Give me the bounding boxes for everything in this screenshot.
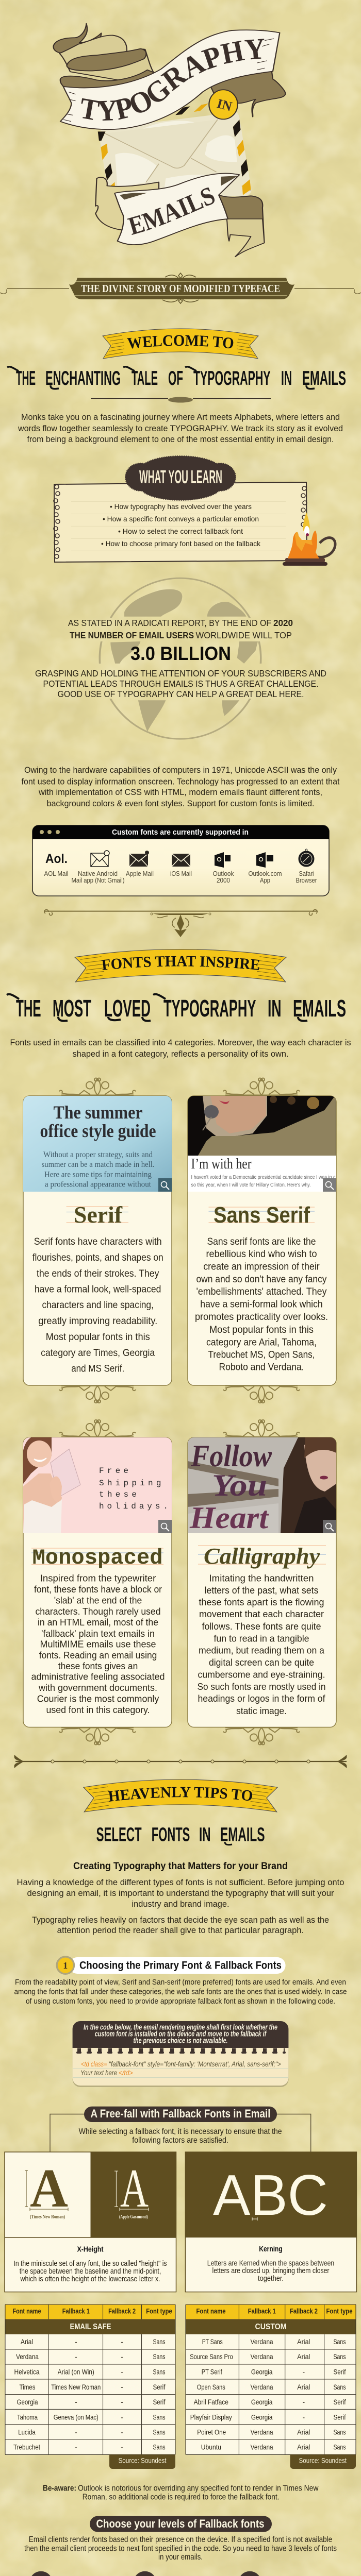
text block: serif description: greatly improving readability. bbox=[38, 1316, 157, 1327]
image: monospaced email sample: Shipping bbox=[99, 1479, 161, 1488]
table: custom fonts: Arial bbox=[297, 2428, 310, 2436]
illustration: apple garamond letter: (Apple Garamond) bbox=[119, 2214, 148, 2219]
image: serif email sample bbox=[23, 1096, 172, 1192]
heading pill: free-fall with fallback fonts: A Free-fall with Fallback Fonts in Email bbox=[91, 2107, 270, 2120]
table: email safe fonts: Geneva (on Mac) bbox=[54, 2413, 99, 2421]
text block: custom fonts history: Owing to the hardware capabilities of computers in 1971, Unicode ASCII was the only bbox=[24, 766, 337, 775]
heading: the enchanting tale of typography in emails: IN bbox=[281, 367, 292, 389]
code: fallback font snippet bbox=[80, 2060, 281, 2077]
image: sans serif email sample: so this year, when I will vote for Hillary Clinton. Here's why. bbox=[191, 1182, 310, 1188]
heading: the most loved typography in emails: THE bbox=[16, 995, 41, 1022]
text block: monospaced description: MultiMIME emails use these bbox=[40, 1639, 156, 1650]
number: 3.0 billion: 3.0 BILLION bbox=[130, 643, 231, 664]
table: custom fonts: CUSTOM bbox=[255, 2323, 287, 2331]
panel: kerning: Letters are Kerned when the spaces between bbox=[207, 2260, 334, 2268]
text block: serif description: Most popular fonts in this bbox=[46, 1332, 150, 1343]
text block: monospaced description: administrative feeling associated bbox=[31, 1672, 165, 1682]
text block: monospaced description: font, these fonts have a block or bbox=[34, 1584, 162, 1595]
level 2 bbox=[134, 2571, 222, 2576]
text block: monospaced description bbox=[31, 1573, 165, 1715]
image: sans serif email sample bbox=[188, 1095, 336, 1192]
icon: android mail bbox=[91, 851, 109, 867]
panel: x-height: X-Height bbox=[77, 2245, 103, 2254]
table: email safe fonts: - bbox=[75, 2443, 77, 2451]
table: email safe fonts: - bbox=[121, 2337, 123, 2346]
divider: beaded line bbox=[14, 1755, 347, 1768]
banner: welcome to: WELCOME TO bbox=[127, 335, 233, 348]
text block: intro: Monks take you on a fascinating journey where Art meets Alphabets, where letters and bbox=[21, 413, 340, 422]
banner: heavenly tips to: HEAVENLY TIPS TO bbox=[108, 1787, 252, 1802]
table: custom fonts bbox=[186, 2304, 356, 2469]
text block: fallback factors: following factors are satisfied. bbox=[132, 2136, 228, 2145]
heading: the most loved typography in emails: LOVED bbox=[104, 995, 151, 1022]
text block: monospaced description: 'slab' at the end of the bbox=[54, 1595, 142, 1605]
table: email safe fonts: - bbox=[75, 2352, 77, 2361]
subheading: creating typography: Creating Typography that Matters for your Brand bbox=[73, 1861, 288, 1872]
panel: x-height: which is often the height of the lowercase letter x. bbox=[20, 2275, 160, 2283]
icon: ios mail bbox=[172, 854, 190, 867]
image: monospaced email sample: holidays. bbox=[99, 1502, 168, 1511]
panel: kerning: letters are closed up, bringing them closer bbox=[212, 2267, 330, 2275]
callout: be-aware: Outlook is notorious for overriding any specified font to render in Times New bbox=[78, 2484, 319, 2493]
callout: be-aware: Roman, so additional code is required to force the fallback font. bbox=[83, 2493, 279, 2501]
panel: kerning: together. bbox=[258, 2275, 284, 2283]
labels: email clients: Outlook bbox=[212, 870, 234, 877]
labels: email clients bbox=[44, 870, 317, 884]
text block: sans serif description: create an impression of their bbox=[203, 1261, 320, 1272]
labels: email clients: AOL Mail bbox=[44, 870, 69, 877]
labels: email clients: Apple Mail bbox=[126, 870, 154, 877]
text block: monospaced description: characters. Though rarely used bbox=[35, 1606, 161, 1617]
panel: kerning bbox=[185, 2152, 356, 2292]
table: email safe fonts: - bbox=[75, 2428, 77, 2436]
code: fallback font snippet: "fallback-font" style="font-family: 'Montserrat', Arial, sans-serif;"> bbox=[109, 2060, 281, 2068]
icon: globe bbox=[100, 578, 261, 739]
illustration: times new roman letter: A bbox=[30, 2158, 68, 2218]
table: email safe fonts: - bbox=[75, 2337, 77, 2346]
text block: serif description bbox=[32, 1236, 163, 1375]
table: custom fonts: Verdana bbox=[251, 2443, 273, 2451]
text block: sans serif description: own and so don't have any fancy bbox=[196, 1274, 327, 1285]
text block: attention challenge: GOOD USE OF TYPOGRAPHY CAN HELP A GREAT DEAL HERE. bbox=[58, 689, 304, 699]
image: serif email sample: a professional appearance without bbox=[45, 1180, 152, 1189]
text block: creating typography: industry and brand image. bbox=[132, 1900, 229, 1909]
icon: safari bbox=[299, 849, 314, 867]
text block: calligraphy description: letters of the past, what sets bbox=[204, 1585, 319, 1596]
code: fallback font snippet: Your text here bbox=[80, 2069, 117, 2077]
table: email safe fonts: - bbox=[75, 2398, 77, 2406]
text block: sans serif description: 'embellishments' attached. They bbox=[196, 1286, 327, 1297]
labels: email clients: Outlook.com bbox=[249, 870, 282, 877]
table: email safe fonts: Times bbox=[20, 2383, 35, 2391]
text block: custom fonts history: background colors & even font styles. Support for custom fonts is limited. bbox=[46, 799, 315, 808]
stat: email users 3.0 billion: WORLDWIDE WILL TOP bbox=[196, 630, 292, 640]
heading: the most loved typography in emails: TYPOGRAPHY bbox=[163, 995, 256, 1022]
text block: creating typography: Having a knowledge of the different types of fonts is not sufficient. Before jumping onto bbox=[17, 1878, 344, 1887]
label: what you learn cloud bbox=[125, 456, 236, 500]
panel: code sample: In the code below, the email rendering engine shall first look whether the bbox=[84, 2024, 277, 2032]
table: email safe fonts: Font name bbox=[12, 2308, 41, 2315]
level 1 bbox=[29, 2571, 112, 2576]
level 3 bbox=[238, 2571, 339, 2576]
text block: serif description: category are Times, Georgia bbox=[41, 1348, 155, 1359]
panel: custom fonts support: Custom fonts are currently supported in bbox=[112, 828, 249, 837]
text block: monospaced description: in an HTML email, most of the bbox=[38, 1617, 158, 1628]
divider: heading ornament bbox=[91, 397, 271, 403]
labels: email clients: App bbox=[260, 876, 270, 884]
table: custom fonts: Sans bbox=[333, 2443, 346, 2451]
labels: email clients: iOS Mail bbox=[170, 870, 192, 877]
text block: tip 1: of using custom fonts, you need to provide appropriate fallback font as shown in the following code. bbox=[26, 1997, 335, 2006]
image: sans serif email sample: I haven't voted for a Democratic presidential candidate since I was in c bbox=[191, 1174, 335, 1180]
panel: custom fonts support bbox=[32, 825, 329, 896]
stat: email users 3.0 billion: THE NUMBER OF EMAIL USERS bbox=[70, 630, 194, 640]
table: email safe fonts: Sans bbox=[153, 2413, 165, 2421]
illustration: kerning letters: ABC bbox=[213, 2163, 328, 2227]
text block: monospaced description: Inspired from the typewriter bbox=[40, 1573, 156, 1584]
panel: code sample bbox=[73, 2021, 289, 2087]
table: custom fonts: Sans bbox=[333, 2337, 346, 2346]
label: what you learn cloud: WHAT YOU LEARN bbox=[139, 466, 222, 487]
list: learning points bbox=[101, 502, 261, 548]
text block: custom fonts history: with implementation of CSS with HTML, modern emails flaunt different fonts, bbox=[38, 788, 322, 797]
source tab: custom table: Source: Soundest bbox=[299, 2456, 347, 2465]
image: monospaced email sample: Free bbox=[99, 1466, 128, 1476]
image: serif email sample: Without a proper strategy, suits and bbox=[43, 1150, 153, 1159]
source tab: email safe table bbox=[109, 2454, 175, 2469]
text block: attention challenge bbox=[35, 668, 326, 699]
image: serif email sample: Here are some tips for maintaining bbox=[44, 1171, 152, 1179]
table: email safe fonts: Font type bbox=[146, 2308, 172, 2315]
callout: be-aware: Be-aware: bbox=[43, 2484, 76, 2493]
text block: calligraphy description: medium, but reading them on a bbox=[199, 1646, 325, 1656]
table: custom fonts: PT Sans bbox=[202, 2337, 223, 2346]
text block: sans serif description bbox=[195, 1236, 328, 1373]
text block: sans serif description: promotes practicality over looks. bbox=[195, 1312, 328, 1323]
text block: font categories intro: shaped in a font category, reflects a personality of its own. bbox=[72, 1049, 289, 1059]
table: custom fonts: Arial bbox=[297, 2443, 310, 2451]
text block: creating typography: attention period the reader shall give to that particular paragraph. bbox=[57, 1926, 304, 1935]
text block: monospaced description: Courier is the most commonly bbox=[37, 1694, 159, 1704]
table: email safe fonts: - bbox=[121, 2413, 123, 2421]
table: custom fonts: Verdana bbox=[251, 2337, 273, 2346]
table: email safe fonts: Arial bbox=[21, 2337, 33, 2346]
banner: tagline: THE DIVINE STORY OF MODIFIED TYPEFACE bbox=[81, 282, 280, 295]
table: custom fonts: Ubuntu bbox=[201, 2443, 221, 2451]
table: email safe fonts: Times New Roman bbox=[51, 2383, 101, 2391]
text block: calligraphy description: fun to read in a tangible bbox=[214, 1633, 309, 1643]
table: email safe fonts: EMAIL SAFE bbox=[70, 2323, 111, 2331]
text block: creating typography: designing an email, it is important to understand the typography that will suit your bbox=[27, 1889, 334, 1898]
panel: sans serif card bbox=[188, 1078, 336, 1403]
heading: the enchanting tale of typography in emails: TALE bbox=[132, 367, 158, 389]
labels: email clients: Browser bbox=[296, 876, 317, 884]
title: IN badge: IN bbox=[215, 96, 234, 114]
table: custom fonts: Georgia bbox=[251, 2413, 273, 2421]
image: calligraphy email sample: Follow bbox=[190, 1439, 272, 1473]
panel: x-height: In the miniscule set of any font, the so called "height" is bbox=[13, 2260, 167, 2268]
text block: font categories intro bbox=[10, 1038, 351, 1059]
text block: intro: from being a background element to one of the most essential entity in email design. bbox=[27, 435, 334, 444]
image: sans serif email sample: I’m with her bbox=[191, 1156, 252, 1172]
table: custom fonts: Verdana bbox=[251, 2383, 273, 2391]
text block: calligraphy description: So such fonts are mostly used in bbox=[197, 1682, 326, 1692]
table: custom fonts: Serif bbox=[333, 2368, 346, 2376]
table: email safe fonts bbox=[5, 2304, 175, 2469]
text block: fallback levels: in your emails. bbox=[158, 2553, 203, 2562]
text block: monospaced description: 'fallback' plain text emails in bbox=[41, 1629, 155, 1639]
table: custom fonts: Font type bbox=[326, 2308, 353, 2315]
callout: be-aware bbox=[43, 2484, 319, 2501]
list: learning points: • How to choose primary font based on the fallback bbox=[101, 539, 261, 548]
text block: serif description: and MS Serif. bbox=[71, 1363, 124, 1375]
table: email safe fonts: - bbox=[121, 2383, 123, 2391]
table: custom fonts: Georgia bbox=[251, 2368, 273, 2376]
icon: outlook 2000 bbox=[215, 852, 231, 868]
table: email safe fonts: Sans bbox=[153, 2337, 165, 2346]
table: email safe fonts: - bbox=[121, 2428, 123, 2436]
illustration: times new roman letter: (Times New Roman) bbox=[30, 2214, 65, 2219]
text block: monospaced description: these fonts gives an bbox=[58, 1661, 138, 1671]
table: custom fonts: Fallback 1 bbox=[248, 2308, 276, 2315]
labels: email clients: Native Android bbox=[78, 870, 118, 877]
table: custom fonts: Font name bbox=[196, 2308, 226, 2315]
icon: apple mail bbox=[129, 851, 149, 867]
heading: the most loved typography in emails: MOST bbox=[53, 995, 91, 1022]
text block: fallback levels bbox=[24, 2535, 337, 2562]
text block: custom fonts history: font used to display information onscreen. Technology has progressed to an extent that bbox=[22, 777, 340, 786]
table: email safe fonts: Sans bbox=[153, 2352, 165, 2361]
image: calligraphy email sample: Heart bbox=[189, 1501, 269, 1535]
text block: calligraphy description: static image. bbox=[236, 1706, 287, 1716]
heading: the enchanting tale of typography in emails: ENCHANTING bbox=[45, 367, 121, 389]
text block: sans serif description: Trebuchet MS, Open Sans, bbox=[208, 1350, 315, 1361]
label: monospaced specimen: Monospaced bbox=[32, 1546, 163, 1570]
image: serif email sample: office style guide bbox=[40, 1121, 156, 1141]
text block: tip 1 bbox=[14, 1978, 347, 2006]
text block: intro bbox=[18, 413, 343, 444]
image: calligraphy email sample: You bbox=[212, 1468, 267, 1502]
list: learning points: • How typography has evolved over the years bbox=[110, 502, 252, 511]
banner: fonts that inspire bbox=[74, 949, 287, 982]
text block: attention challenge: GRASPING AND HOLDING THE ATTENTION OF YOUR SUBSCRIBERS AND bbox=[35, 668, 326, 679]
image: monospaced email sample: these bbox=[99, 1490, 137, 1499]
panel: calligraphy card bbox=[188, 1420, 336, 1744]
label: serif specimen: Serif bbox=[74, 1201, 123, 1228]
text block: serif description: Serif fonts have characters with bbox=[34, 1236, 162, 1247]
heading: select fonts in emails: SELECT bbox=[96, 1824, 142, 1846]
text block: fallback factors bbox=[79, 2127, 282, 2145]
text block: calligraphy description: Imitating the handwritten bbox=[209, 1573, 314, 1584]
table: email safe fonts: Serif bbox=[153, 2398, 166, 2406]
label: sans serif specimen: Sans Serif bbox=[214, 1202, 310, 1228]
heading pill: levels of fallback fonts: Choose your levels of Fallback fonts bbox=[96, 2517, 264, 2530]
heading: the enchanting tale of typography in emails: TYPOGRAPHY bbox=[193, 367, 270, 389]
panel: code sample: the previous choice is not available. bbox=[133, 2037, 228, 2045]
table: custom fonts: Sans bbox=[333, 2352, 346, 2361]
heading: the most loved typography in emails: IN bbox=[268, 995, 282, 1022]
table: email safe fonts: Tahoma bbox=[17, 2413, 38, 2421]
text block: calligraphy description: these fonts apart is the flowing bbox=[199, 1597, 324, 1607]
banner: tagline bbox=[0, 273, 361, 303]
text block: calligraphy description: headings or logos in the form of bbox=[198, 1693, 325, 1704]
table: custom fonts: Open Sans bbox=[197, 2383, 225, 2391]
tip 1: heading pill: Choosing the Primary Font & Fallback Fonts bbox=[79, 1959, 282, 1971]
text block: font categories intro: Fonts used in emails can be classified into 4 categories. Moreover, the way each character is bbox=[10, 1038, 351, 1047]
banner: welcome to bbox=[102, 329, 259, 359]
hero: typography in emails ribbon illustration bbox=[53, 23, 286, 258]
table: custom fonts: Playfair Display bbox=[190, 2413, 232, 2421]
table: custom fonts: Poiret One bbox=[197, 2428, 226, 2436]
text block: calligraphy description bbox=[197, 1573, 326, 1716]
table: custom fonts: Source Sans Pro bbox=[190, 2352, 233, 2361]
table: email safe fonts: - bbox=[121, 2398, 123, 2406]
text block: calligraphy description: cumbersome and eye-straining. bbox=[198, 1669, 325, 1680]
table: custom fonts: Georgia bbox=[251, 2398, 273, 2406]
text block: calligraphy description: movement that each character bbox=[199, 1609, 324, 1619]
table: custom fonts: Sans bbox=[333, 2383, 346, 2391]
heading: the enchanting tale of typography in emails: THE bbox=[16, 367, 36, 389]
banner: heavenly tips to bbox=[83, 1780, 278, 1812]
title: TYPOGRAPHY: TYPOGRAPHY bbox=[81, 39, 264, 121]
table: email safe fonts: Lucida bbox=[18, 2428, 36, 2436]
table: custom fonts: Verdana bbox=[251, 2352, 273, 2361]
text block: sans serif description: rebellious kind who wish to bbox=[206, 1249, 317, 1260]
table: email safe fonts: Georgia bbox=[17, 2398, 38, 2406]
text block: creating typography bbox=[17, 1878, 344, 1935]
tip 1: heading pill: 1 bbox=[63, 1960, 68, 1971]
table: custom fonts: Verdana bbox=[251, 2428, 273, 2436]
text block: sans serif description: Sans serif fonts are like the bbox=[207, 1236, 316, 1247]
table: custom fonts: Serif bbox=[333, 2413, 346, 2421]
text block: sans serif description: category are Arial, Tahoma, bbox=[206, 1337, 317, 1348]
table: email safe fonts: Sans bbox=[153, 2368, 165, 2376]
table: email safe fonts: Helvetica bbox=[14, 2368, 40, 2376]
text block: creating typography: Typography relies heavily on factors that decide the eye scan path as well as the bbox=[32, 1916, 329, 1925]
image: calligraphy email sample bbox=[188, 1437, 336, 1535]
text block: intro: words flow together seamlessly to create TYPOGRAPHY. We track its story as it evolved bbox=[18, 424, 343, 433]
stat: email users 3.0 billion: 2020 bbox=[273, 618, 293, 628]
text block: serif description: the ends of their strokes. They bbox=[37, 1268, 159, 1279]
tip 1: heading pill bbox=[56, 1956, 286, 1975]
text block: serif description: characters and line spacing, bbox=[42, 1300, 154, 1311]
text block: monospaced description: fonts. Reading an email using bbox=[39, 1650, 157, 1660]
text block: monospaced description: with government documents. bbox=[38, 1683, 157, 1693]
table: custom fonts: - bbox=[302, 2413, 305, 2421]
icon: aol: Aol. bbox=[45, 852, 68, 866]
table: custom fonts: PT Serif bbox=[202, 2368, 222, 2376]
panel: code sample: custom font is installed on the device and move to the fallback if bbox=[95, 2030, 267, 2038]
banner: fonts that inspire: FONTS THAT INSPIRE bbox=[101, 956, 259, 970]
labels: email clients: 2000 bbox=[217, 876, 230, 884]
heading: the enchanting tale of typography in emails: OF bbox=[168, 367, 183, 389]
table: email safe fonts: - bbox=[121, 2443, 123, 2451]
table: custom fonts: Fallback 2 bbox=[290, 2308, 318, 2315]
title: EMAILS: EMAILS bbox=[127, 188, 215, 235]
text block: attention challenge: POTENTIAL LEADS THROUGH EMAILS IS THUS A GREAT CHALLENGE. bbox=[43, 679, 319, 689]
text block: monospaced description: used font in this category. bbox=[46, 1705, 150, 1715]
labels: email clients: Mail app (Not Gmail) bbox=[71, 876, 125, 884]
image: serif email sample: summer can be a match made in hell. bbox=[41, 1160, 155, 1169]
table: email safe fonts: Trebuchet bbox=[13, 2443, 40, 2451]
table: custom fonts: Arial bbox=[297, 2383, 310, 2391]
text block: sans serif description: have a semi-formal look which bbox=[200, 1299, 323, 1310]
panel: what you learn bbox=[54, 456, 335, 566]
text block: serif description: flourishes, points, and shapes on bbox=[32, 1252, 163, 1263]
table: custom fonts: Abril Fatface bbox=[194, 2398, 228, 2406]
table: custom fonts: Sans bbox=[333, 2428, 346, 2436]
text block: calligraphy description: follows. These fonts are quite bbox=[202, 1621, 321, 1632]
source tab: custom table bbox=[290, 2454, 356, 2469]
code: fallback font snippet: <td class= bbox=[81, 2060, 107, 2068]
image: serif email sample: The summer bbox=[54, 1102, 143, 1123]
table: email safe fonts: Fallback 1 bbox=[62, 2308, 90, 2315]
text block: serif description: have a formal look, well-spaced bbox=[35, 1284, 161, 1295]
table: email safe fonts: Fallback 2 bbox=[108, 2308, 136, 2315]
table: email safe fonts: Sans bbox=[153, 2428, 165, 2436]
table: email safe fonts: Sans bbox=[153, 2443, 165, 2451]
image: monospaced email sample bbox=[23, 1435, 172, 1533]
table: email safe fonts: Verdana bbox=[16, 2352, 39, 2361]
illustration: apple garamond letter bbox=[114, 2158, 149, 2219]
heading pill: free-fall with fallback fonts bbox=[50, 2107, 311, 2152]
icon: outlook.com bbox=[256, 852, 273, 868]
table: email safe fonts: - bbox=[121, 2368, 123, 2376]
table: custom fonts: - bbox=[302, 2368, 305, 2376]
code: fallback font snippet: </td> bbox=[119, 2069, 133, 2077]
panel: serif card bbox=[23, 1078, 172, 1403]
heading: the most loved typography in emails bbox=[7, 994, 346, 1022]
source tab: email safe table: Source: Soundest bbox=[119, 2456, 167, 2465]
heading: select fonts in emails: IN bbox=[199, 1824, 210, 1846]
text block: calligraphy description: digital screen can be quite bbox=[209, 1657, 314, 1668]
stat: email users 3.0 billion: AS STATED IN A RADICATI REPORT, BY THE END OF bbox=[68, 618, 271, 628]
text block: sans serif description: Most popular fonts in this bbox=[209, 1325, 314, 1335]
heading: select fonts in emails: EMAILS bbox=[220, 1824, 265, 1846]
heading: select fonts in emails: FONTS bbox=[152, 1824, 190, 1846]
table: email safe fonts: Arial (on Win) bbox=[58, 2368, 94, 2376]
table: custom fonts: Serif bbox=[333, 2398, 346, 2406]
panel: x-height bbox=[5, 2152, 176, 2292]
table: custom fonts: Arial bbox=[297, 2337, 310, 2346]
stat: email users 3.0 billion bbox=[35, 618, 326, 699]
table: email safe fonts: Serif bbox=[153, 2383, 166, 2391]
panel: kerning: Kerning bbox=[259, 2245, 283, 2253]
heading: the enchanting tale of typography in emails bbox=[7, 367, 346, 389]
icon: candle bbox=[283, 512, 335, 566]
text block: custom fonts history bbox=[22, 766, 340, 808]
list: learning points: • How a specific font conveys a particular emotion bbox=[103, 515, 259, 523]
panel: monospaced card bbox=[23, 1420, 172, 1744]
table: email safe fonts: - bbox=[121, 2352, 123, 2361]
illustration: apple garamond letter: A bbox=[120, 2158, 149, 2218]
heading: select fonts in emails bbox=[96, 1824, 265, 1846]
panel: x-height: the space between the baseline and the mid-point, bbox=[20, 2267, 161, 2276]
icon: ribbon and envelope artwork bbox=[54, 24, 286, 257]
labels: email clients: Safari bbox=[299, 870, 314, 877]
text block: sans serif description: Roboto and Verdana. bbox=[219, 1362, 304, 1373]
list: learning points: • How to select the correct fallback font bbox=[118, 527, 243, 535]
label: calligraphy specimen: Calligraphy bbox=[204, 1544, 320, 1569]
table: custom fonts: - bbox=[302, 2398, 305, 2406]
table: custom fonts: Arial bbox=[297, 2352, 310, 2361]
text block: fallback factors: While selecting a fallback font, it is necessary to ensure that the bbox=[79, 2127, 282, 2136]
